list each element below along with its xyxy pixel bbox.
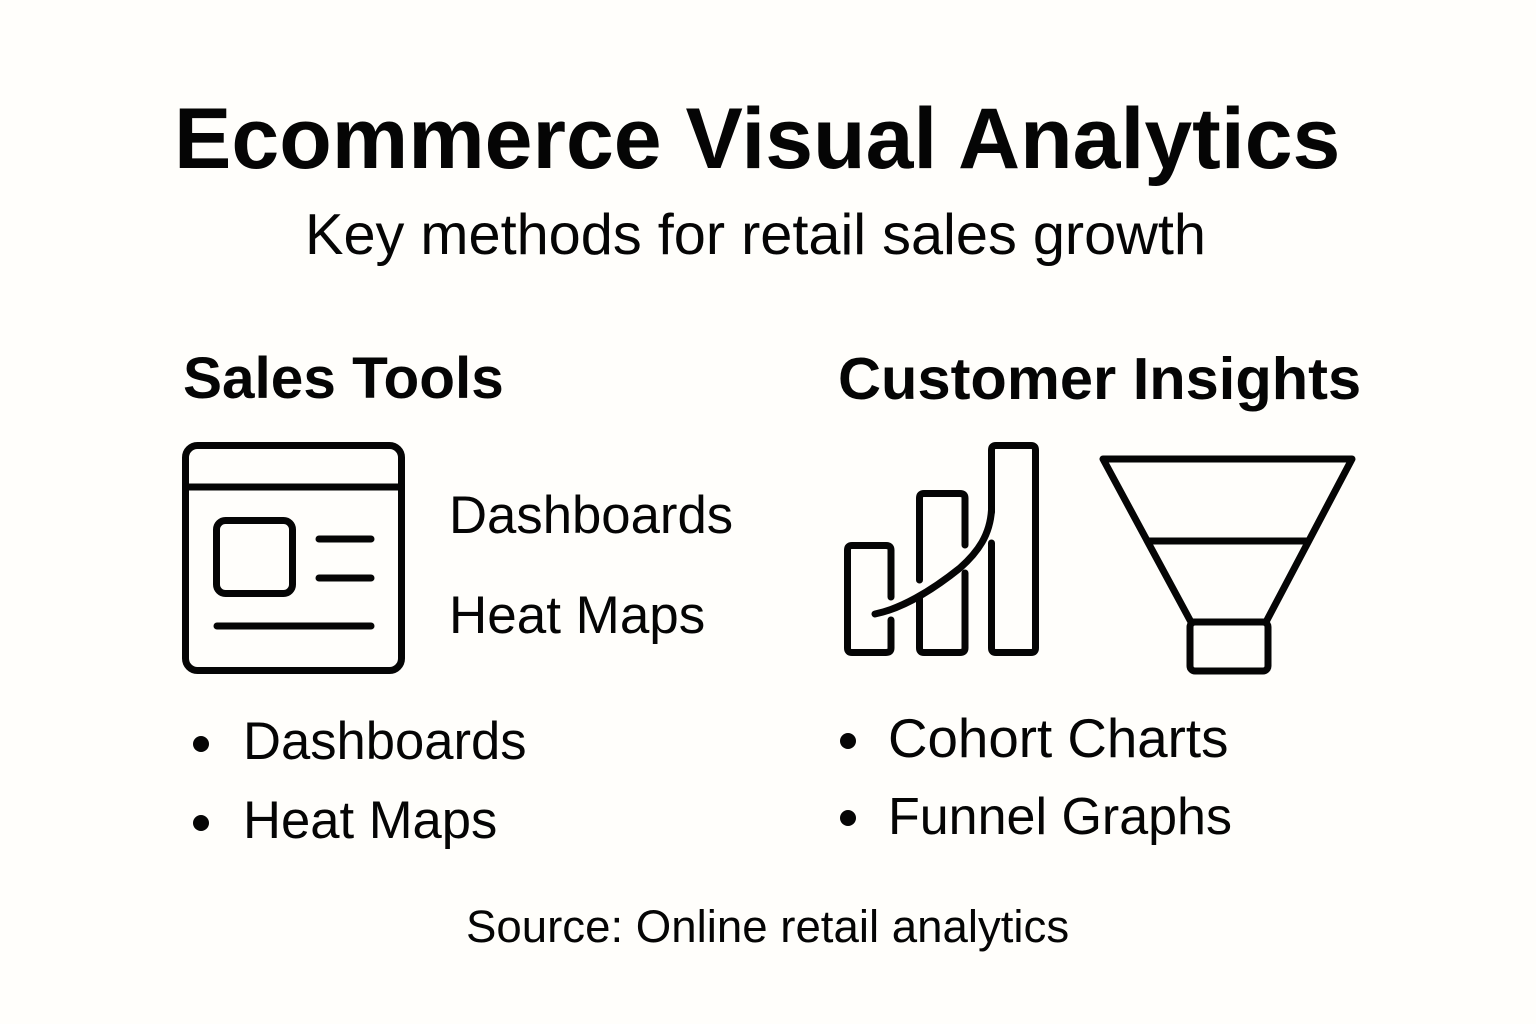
- title: Ecommerce Visual Analytics: [174, 91, 1340, 187]
- heading: sales tools: Sales Tools: [183, 346, 504, 411]
- bullet item: cohort charts: Cohort Charts: [888, 707, 1228, 769]
- source note: Source: Online retail analytics: [466, 901, 1069, 952]
- subtitle: Key methods for retail sales growth: [305, 203, 1206, 267]
- list: sales tools: [193, 712, 527, 850]
- bullet item: dashboards: Dashboards: [243, 712, 527, 771]
- label: dashboards: Dashboards: [449, 486, 733, 545]
- bullet item: heat maps: Heat Maps: [243, 791, 497, 850]
- list: customer insights: [840, 707, 1232, 846]
- bullet item: funnel graphs: Funnel Graphs: [888, 788, 1232, 846]
- label: heat maps: Heat Maps: [449, 586, 705, 645]
- heading: customer insights: Customer Insights: [838, 344, 1361, 412]
